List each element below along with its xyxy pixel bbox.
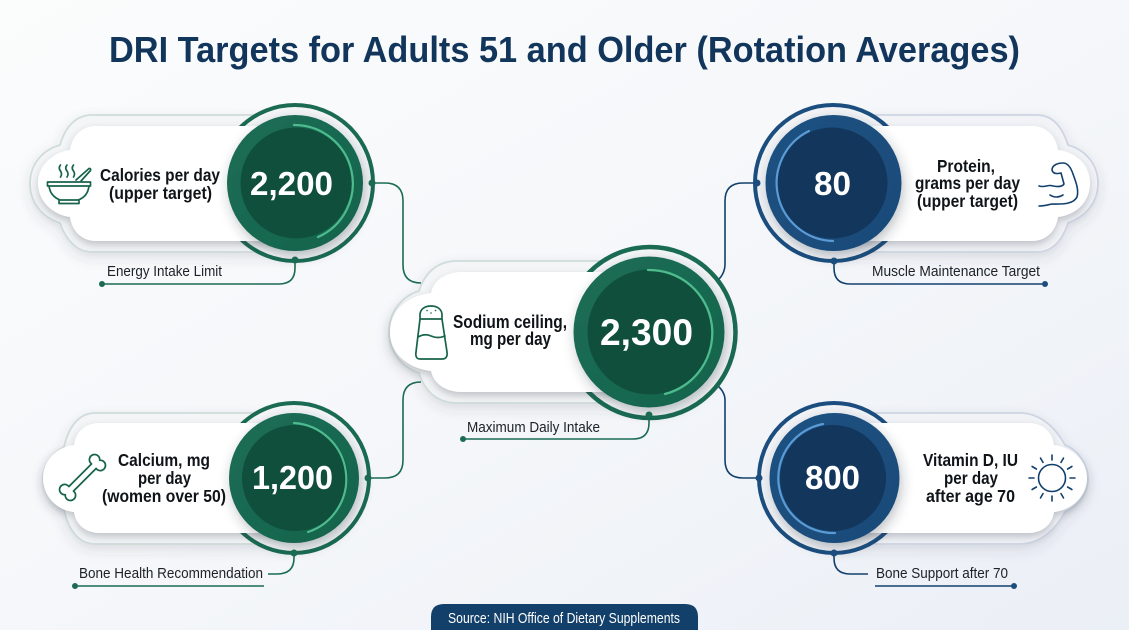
- outer ring: [759, 403, 909, 553]
- connector node: [756, 474, 762, 482]
- label text: vitamin D: Vitamin D, IU: [923, 450, 1018, 470]
- label text: calories: [100, 165, 220, 203]
- label text: protein: (upper target): [917, 191, 1018, 211]
- sub label: muscle maintenance target: Muscle Maintenance Target: [872, 263, 1041, 280]
- value disc: [227, 115, 363, 251]
- white pill: [43, 423, 300, 533]
- panel: vitamin D: [756, 403, 1088, 589]
- label text: calcium: (women over 50): [102, 486, 226, 506]
- panel: sodium: [389, 247, 736, 442]
- label text: calcium: per day: [138, 468, 191, 488]
- icon: sun: [1029, 455, 1075, 501]
- label text: protein: grams per day: [915, 173, 1020, 193]
- label text: protein: Protein,: [937, 156, 995, 176]
- sub label: bone health recommendation: Bone Health Recommendation: [79, 565, 263, 582]
- outer ring: [755, 105, 911, 261]
- label text: sodium: [453, 312, 567, 349]
- panel: calcium: [43, 403, 372, 589]
- outer ring: [219, 403, 369, 553]
- sub label: bone support after 70: [830, 550, 1017, 589]
- label text: calories: Calories per day: [100, 165, 220, 185]
- value disc: 2,200: [250, 165, 333, 202]
- label text: calcium: [102, 450, 226, 506]
- title: DRI Targets for Adults 51 and Older (Rotation Averages): [109, 29, 1020, 70]
- value disc: [766, 115, 902, 251]
- panel: protein: [754, 105, 1098, 287]
- white pill: [390, 272, 650, 392]
- sub label: energy intake limit: [99, 256, 298, 287]
- sub label: maximum daily intake: [460, 412, 652, 442]
- sub label: maximum daily intake: Maximum Daily Intake: [467, 419, 600, 436]
- source footer: Source: NIH Office of Dietary Supplements: [448, 610, 680, 627]
- source footer: [431, 604, 698, 630]
- value disc: 2,300: [600, 312, 693, 353]
- outer ring: [564, 247, 736, 418]
- label text: calcium: Calcium, mg: [118, 450, 210, 470]
- icon: salt shaker: [416, 306, 447, 359]
- card outline: [389, 261, 650, 403]
- card outline: [834, 413, 1088, 544]
- value disc: [229, 413, 359, 543]
- icon: bowl: [48, 165, 91, 204]
- sub label: bone health recommendation: [72, 550, 298, 589]
- sub label: bone support after 70: Bone Support after 70: [876, 565, 1008, 582]
- connector node: [364, 474, 372, 482]
- label text: sodium: Sodium ceiling,: [453, 312, 567, 332]
- value disc: 800: [805, 459, 860, 496]
- white pill: [830, 423, 1087, 533]
- label text: vitamin D: [923, 450, 1018, 506]
- label text: sodium: mg per day: [470, 329, 551, 349]
- label text: protein: [915, 156, 1020, 211]
- value disc: [574, 256, 724, 408]
- card outline: [833, 115, 1098, 252]
- white pill: [38, 126, 300, 241]
- panel: calories: [30, 105, 376, 287]
- value disc: 80: [814, 165, 851, 202]
- card outline: [30, 115, 295, 252]
- value disc: 1,200: [252, 459, 333, 496]
- icon: bone: [57, 452, 108, 503]
- icon: flexed arm: [1039, 163, 1078, 206]
- white pill: [830, 126, 1090, 241]
- outer ring: [217, 105, 373, 261]
- value disc: [770, 413, 900, 543]
- label text: calories: (upper target): [109, 183, 212, 203]
- label text: vitamin D: after age 70: [926, 486, 1015, 506]
- sub label: muscle maintenance target: [830, 258, 1048, 287]
- connectors to the centre panel: [368, 183, 759, 478]
- connector node: [754, 180, 760, 186]
- sub label: energy intake limit: Energy Intake Limit: [107, 263, 223, 280]
- connector node: [368, 180, 376, 186]
- label text: vitamin D: per day: [944, 468, 998, 488]
- card outline: [43, 413, 294, 544]
